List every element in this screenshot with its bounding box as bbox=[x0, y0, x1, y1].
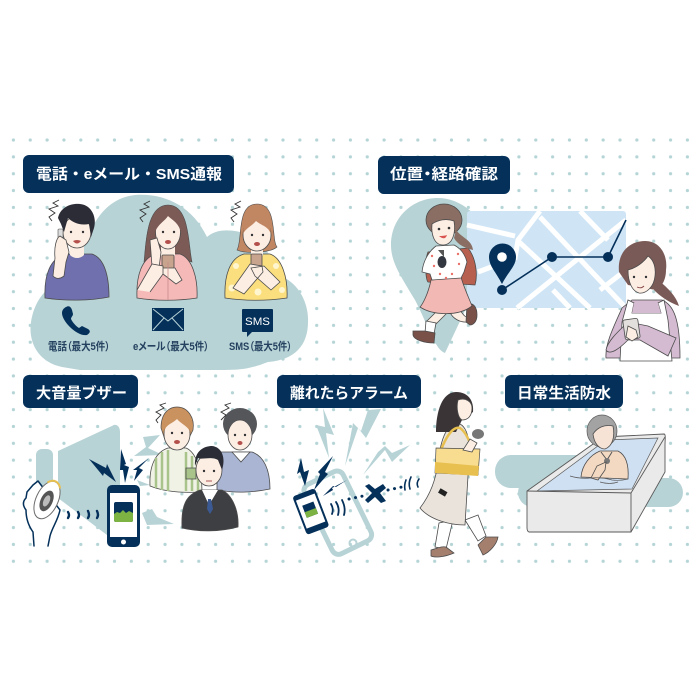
caption: SMS: SMS（最大5件） bbox=[229, 339, 292, 353]
signal dots bbox=[68, 511, 98, 518]
pale phone background bbox=[36, 425, 174, 535]
route and pin bbox=[489, 220, 626, 295]
panel: waterproof bbox=[495, 375, 683, 532]
cloud background bbox=[30, 195, 308, 370]
icon: SMS bubble bbox=[242, 309, 273, 337]
heading: location: 位置・経路確認 bbox=[390, 165, 498, 183]
person: man on phone bbox=[45, 200, 109, 300]
map bbox=[467, 211, 626, 308]
heading: separation alarm bbox=[277, 375, 421, 408]
icon: hand holding buzzer bbox=[23, 477, 66, 546]
panel: location bbox=[378, 156, 680, 361]
person: man in suit bbox=[182, 446, 238, 531]
teardrop background bbox=[391, 198, 482, 353]
person: woman with smartphone, long hair bbox=[137, 201, 197, 300]
caption: phone: 電話（最大5件） bbox=[48, 339, 110, 353]
person: woman with bag bbox=[420, 392, 498, 557]
icon: small smartphone bbox=[292, 488, 329, 535]
heading: location bbox=[378, 156, 510, 194]
panel: buzzer bbox=[23, 375, 270, 547]
heading: waterproof: 日常生活防水 bbox=[517, 384, 611, 402]
heading: buzzer bbox=[23, 375, 138, 408]
icon: small alarm bolts bbox=[297, 456, 347, 496]
heading: separation alarm: 離れたらアラーム bbox=[290, 384, 408, 402]
person: girl walking bbox=[413, 204, 477, 343]
caption: email: eメール（最大5件） bbox=[133, 339, 209, 353]
pale pill background bbox=[495, 455, 683, 507]
bathtub bbox=[527, 434, 665, 532]
panel: notification bbox=[23, 155, 308, 370]
person: man striped shirt bbox=[150, 403, 202, 492]
icon: alarm bolts bbox=[89, 449, 149, 483]
heading: waterproof bbox=[505, 375, 623, 408]
person: elderly woman bathing bbox=[570, 415, 628, 484]
heading: notification bbox=[23, 155, 234, 193]
icon: SMS bubble: SMS bbox=[245, 316, 270, 328]
signal arcs and cross bbox=[331, 477, 419, 515]
heading: buzzer: 大音量ブザー bbox=[36, 384, 127, 402]
panel: separation alarm bbox=[277, 375, 498, 557]
icon: smartphone with app bbox=[107, 485, 140, 547]
person: woman with smartphone, short hair bbox=[225, 201, 287, 300]
icon: telephone bbox=[62, 306, 90, 335]
icon: envelope bbox=[152, 308, 184, 331]
heading: notification: 電話・eメール・SMS通報 bbox=[36, 166, 222, 183]
person: mother checking phone bbox=[606, 241, 680, 361]
person: woman blue sweater bbox=[217, 403, 270, 492]
pale bolts and phone outline bbox=[302, 408, 410, 557]
